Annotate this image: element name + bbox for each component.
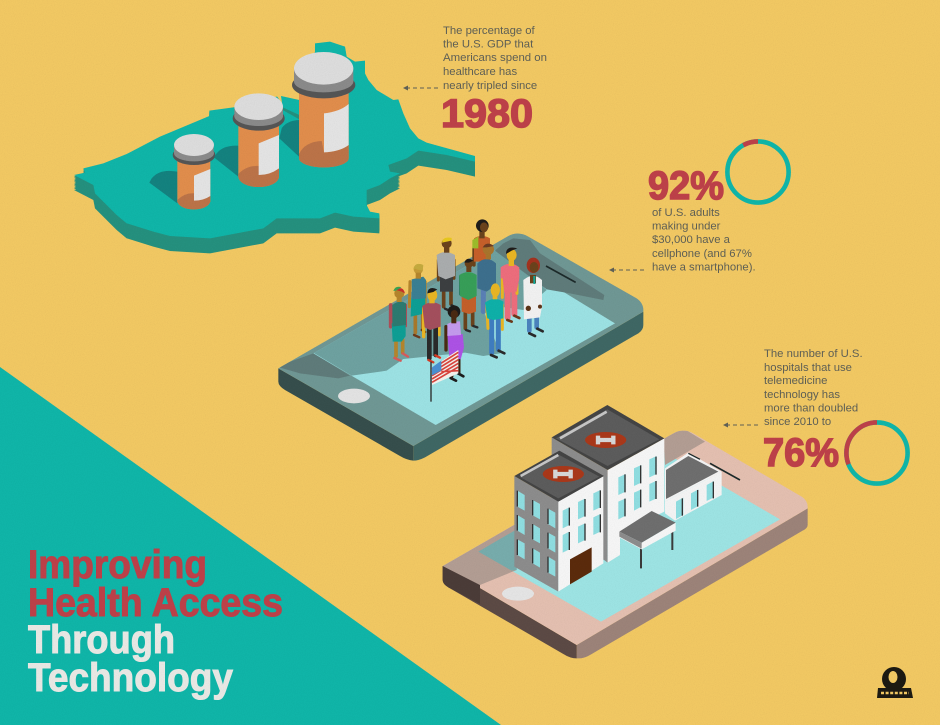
home button (502, 587, 534, 601)
person: woman in orange vest (472, 219, 490, 265)
front tower (514, 451, 604, 592)
stat: 92%: 92% (648, 164, 724, 208)
person: man in grey shirt (437, 238, 455, 310)
person: child with cap in green shirt (391, 287, 408, 361)
text: GDP fact: Americans spend on (443, 52, 547, 64)
text: telemedicine fact: telemedicine (764, 375, 827, 387)
medium pill bottle (214, 93, 285, 187)
phone body right side (413, 312, 643, 461)
illustration: phone with people (277, 219, 643, 461)
phone screen (313, 250, 615, 425)
entrance canopy (619, 511, 676, 568)
map shadow on screen (303, 243, 547, 376)
donut chart: 92% (727, 141, 789, 203)
person: man in green shirt (459, 259, 477, 331)
person: woman in purple dress (446, 305, 464, 381)
donut chart: 76% (846, 422, 908, 484)
phone body left side (443, 566, 577, 658)
map shadow on rim (277, 238, 604, 378)
person: man in pink scrubs (501, 248, 519, 322)
title: Improving (28, 543, 207, 587)
text: cellphone fact: making under (652, 220, 721, 232)
home button (338, 389, 370, 403)
large pill bottle (279, 52, 355, 167)
hospital building (514, 405, 722, 592)
person: man in maroon shirt (422, 288, 441, 362)
title: Through (28, 618, 175, 662)
person: man in blue jacket (477, 244, 496, 312)
illustration: phone with hospital (443, 405, 808, 658)
phone screen (478, 448, 780, 622)
phone body left side (278, 368, 413, 461)
logo badge (877, 667, 913, 698)
title: Health Access (28, 581, 283, 625)
person: bald man in teal shirt (485, 283, 504, 357)
text: telemedicine fact: since 2010 to (764, 416, 831, 428)
text: cellphone fact: cellphone (and 67% (652, 248, 752, 260)
text: GDP fact: The percentage of (443, 25, 536, 37)
building shadow on phone (443, 428, 705, 585)
text: telemedicine fact: hospitals that use (764, 362, 852, 374)
person: doctor in white coat (523, 258, 543, 336)
text: cellphone fact: of U.S. adults (652, 207, 720, 219)
text: cellphone fact: have a smartphone). (652, 262, 756, 274)
phone body right side (577, 508, 808, 658)
text: telemedicine fact: The number of U.S. (764, 348, 863, 360)
text: GDP fact: healthcare has (443, 66, 517, 78)
text: cellphone fact: $30,000 have a (652, 234, 731, 246)
title: Technology (28, 656, 234, 700)
teal corner triangle (0, 367, 501, 725)
stat: 1980: 1980 (441, 92, 533, 136)
map top surface (74, 42, 475, 238)
text: GDP fact: nearly tripled since (443, 80, 537, 92)
phone face (278, 233, 643, 446)
text: telemedicine fact: technology has (764, 389, 840, 401)
text: telemedicine fact (764, 348, 863, 428)
map extrusion (74, 43, 475, 253)
text: telemedicine fact: more than doubled (764, 402, 858, 414)
arrow: telemedicine fact to hospital (723, 422, 758, 428)
text: cellphone fact (652, 207, 756, 274)
text: GDP fact: the U.S. GDP that (443, 38, 534, 50)
phone face (443, 431, 808, 645)
text: GDP fact (443, 25, 547, 92)
title (28, 543, 283, 700)
arrow: GDP fact to map (403, 86, 438, 90)
rear wing (665, 453, 722, 521)
speaker (710, 463, 740, 480)
american flag (431, 350, 458, 402)
small pill bottle (149, 134, 215, 209)
arrow: cellphone fact to phone (609, 268, 644, 272)
person: blond woman in teal (409, 264, 426, 337)
illustration: US map with pill bottles (74, 42, 475, 253)
stat: 76%: 76% (763, 431, 839, 475)
speaker (546, 266, 576, 282)
great lakes notch (277, 95, 300, 108)
back tower (552, 405, 664, 563)
